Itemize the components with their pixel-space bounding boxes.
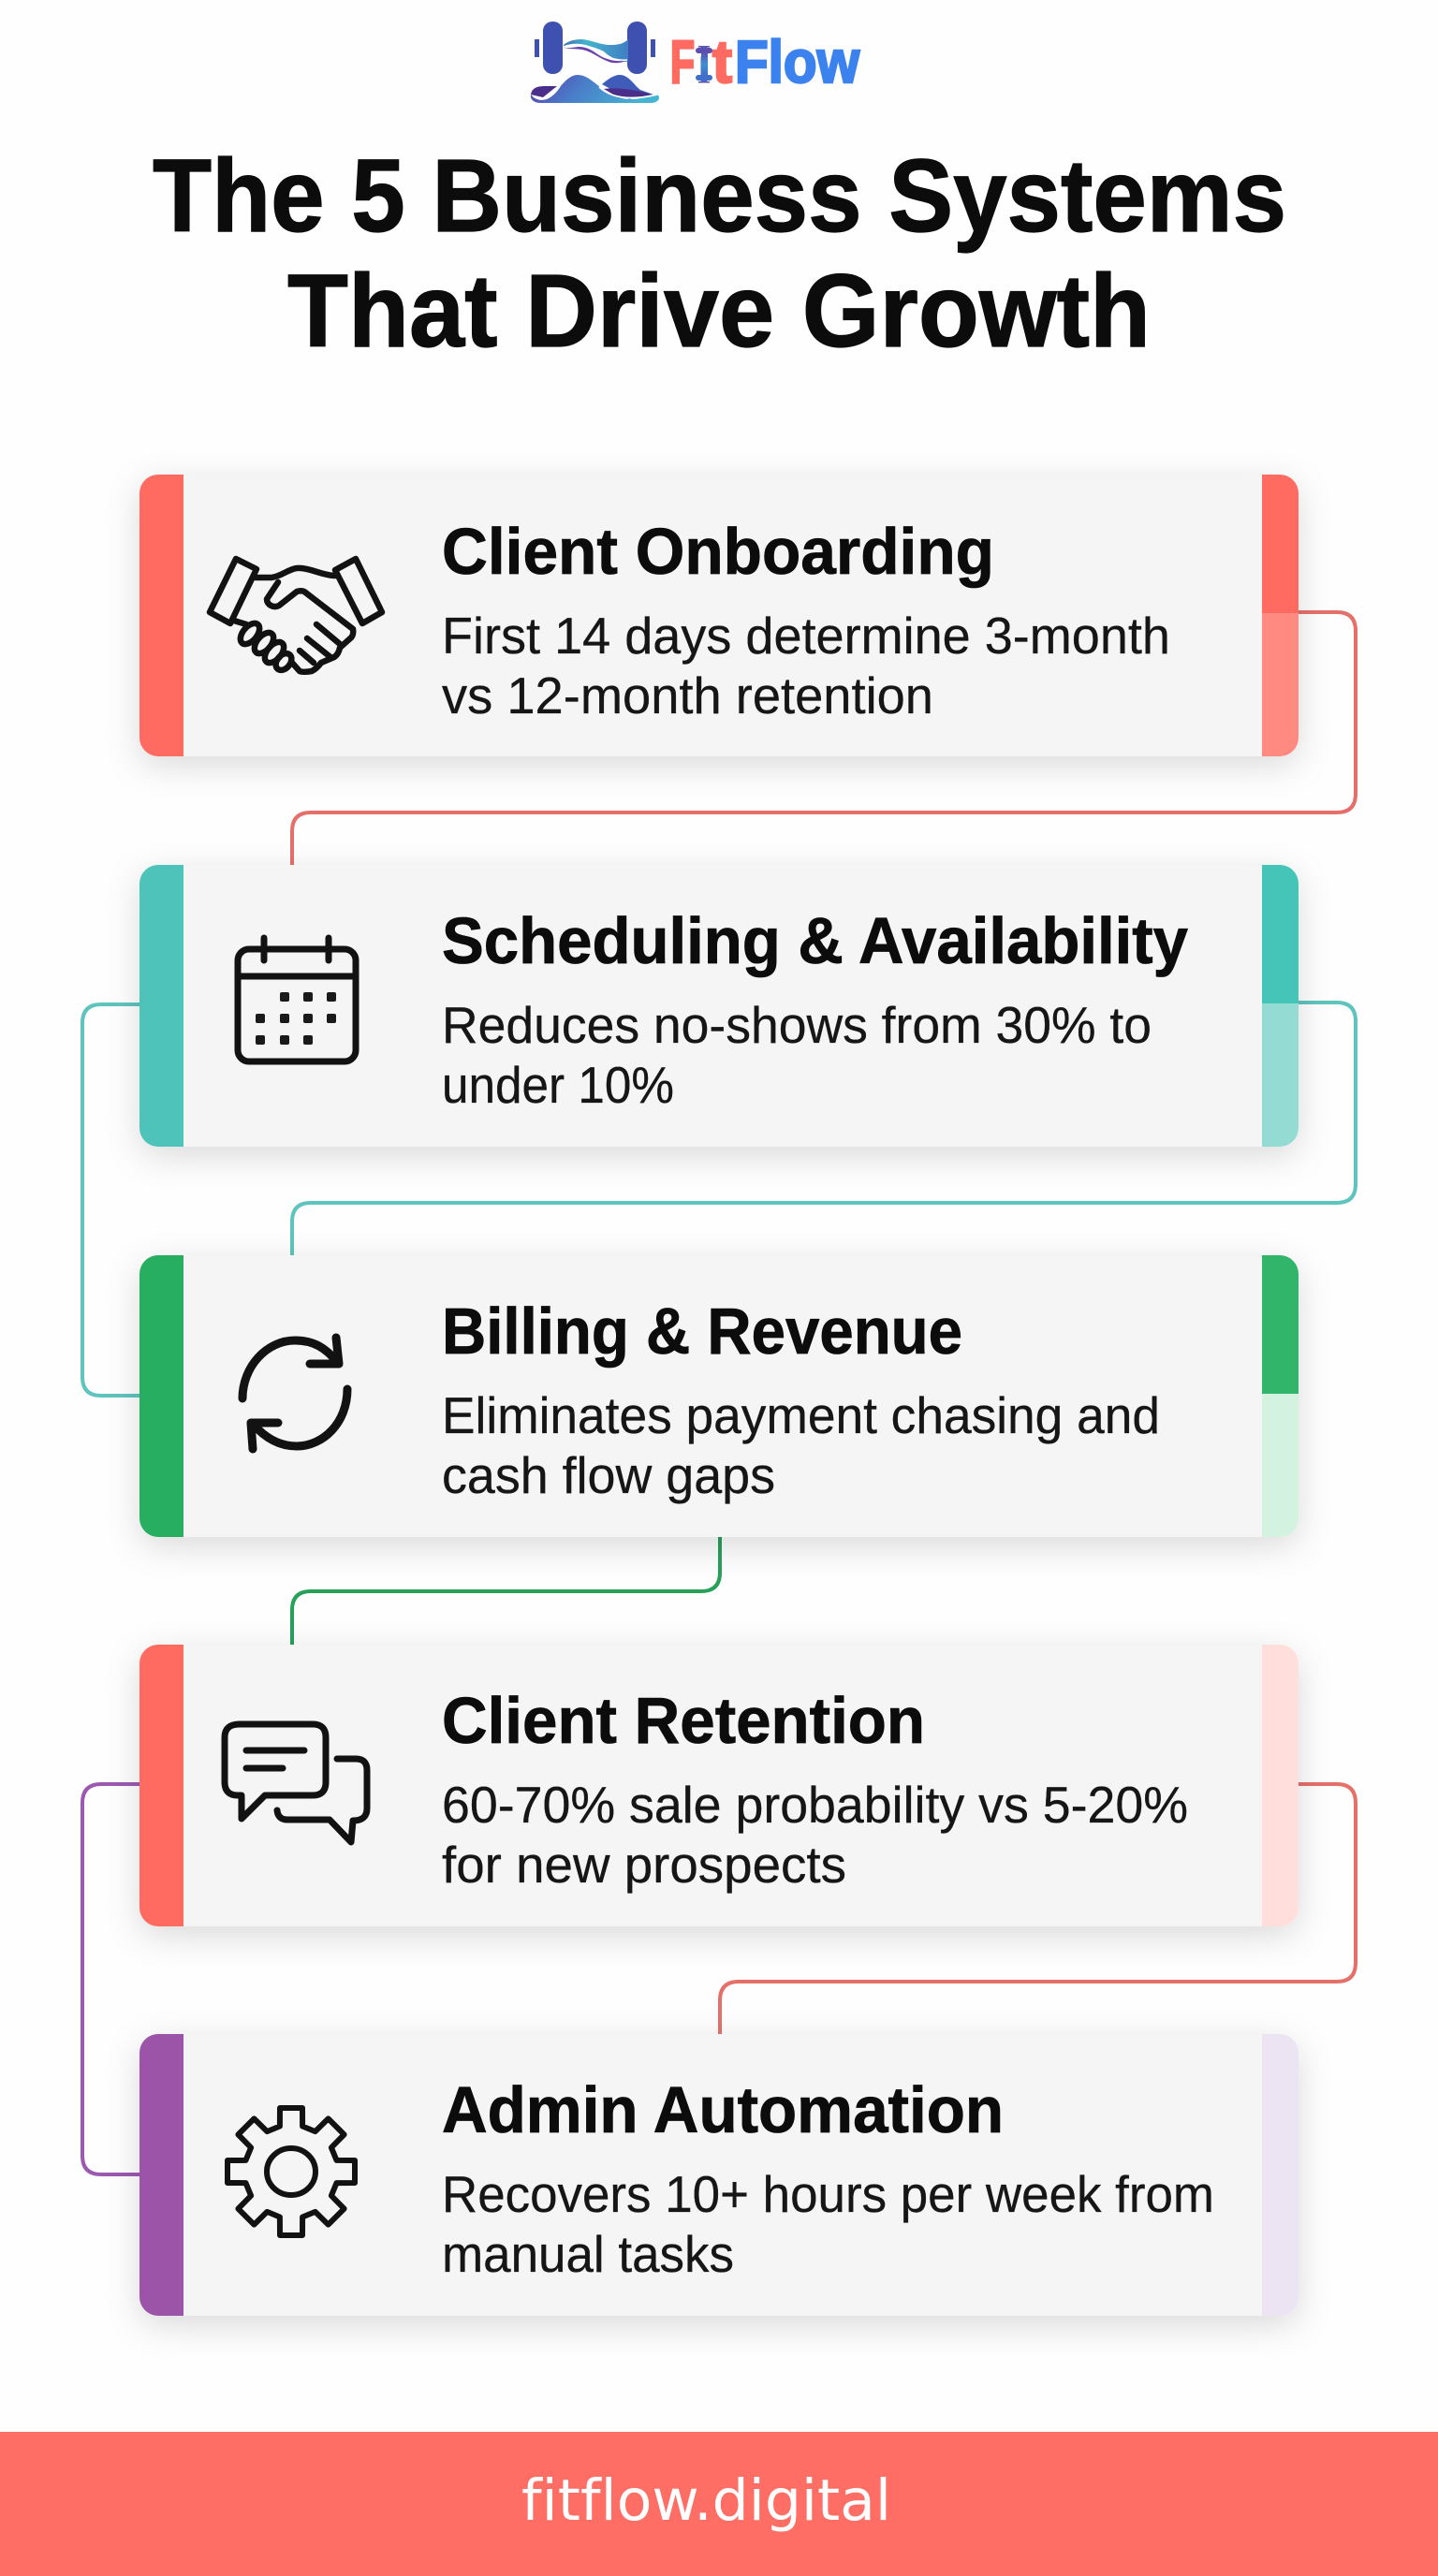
icon: chat bubbles — [225, 1724, 367, 1842]
connector: billing to retention — [292, 1536, 720, 1645]
card description: vs 12-month retention — [442, 666, 933, 724]
card description: Reduces no-shows from 30% to — [442, 996, 1152, 1054]
connector: onboarding to scheduling — [292, 612, 1356, 866]
connector: scheduling to billing right — [292, 1003, 1356, 1255]
card description — [442, 996, 1152, 1114]
card description: Eliminates payment chasing and — [442, 1386, 1160, 1444]
footer band — [0, 2432, 1438, 2576]
title: The 5 Business Systems — [153, 139, 1286, 254]
icon: gear — [227, 2108, 355, 2235]
card description — [442, 1776, 1188, 1894]
card description: manual tasks — [442, 2225, 734, 2283]
icon: refresh arrows — [242, 1338, 347, 1449]
panel: Admin Automation — [139, 2034, 1299, 2316]
card heading: Client Onboarding — [442, 515, 994, 588]
logo: FitFlow — [531, 22, 859, 103]
card heading: Admin Automation — [442, 2073, 1004, 2146]
card heading: Scheduling & Availability — [442, 904, 1188, 977]
card description: 60-70% sale probability vs 5-20% — [442, 1776, 1188, 1834]
logo wordmark: t — [712, 28, 732, 95]
card description: Recovers 10+ hours per week from — [442, 2165, 1214, 2223]
panel: Billing & Revenue — [139, 1255, 1299, 1537]
card description — [442, 2165, 1214, 2283]
connector: scheduling to billing left — [82, 1004, 139, 1396]
card description — [442, 607, 1170, 724]
card heading: Client Retention — [442, 1684, 925, 1757]
card heading: Billing & Revenue — [442, 1295, 962, 1368]
card description: First 14 days determine 3-month — [442, 607, 1170, 665]
card description — [442, 1386, 1160, 1504]
connector: retention to automation left — [82, 1784, 139, 2174]
panel: Scheduling & Availability — [139, 865, 1299, 1147]
panel: Client Onboarding — [139, 475, 1299, 756]
panel: Client Retention — [139, 1645, 1299, 1926]
logo wordmark: i — [697, 39, 711, 92]
card description: cash flow gaps — [442, 1446, 775, 1504]
logo wordmark — [670, 28, 859, 95]
connector: retention to automation right — [720, 1784, 1356, 2034]
footer url: fitflow.digital — [521, 2467, 891, 2534]
card description: under 10% — [442, 1056, 674, 1114]
icon: dumbbell with wave — [531, 22, 659, 103]
logo wordmark: Flow — [735, 28, 859, 95]
title: That Drive Growth — [287, 254, 1151, 369]
icon: handshake — [210, 559, 382, 673]
logo wordmark: F — [670, 28, 695, 95]
icon: calendar — [238, 938, 356, 1061]
title — [153, 139, 1286, 369]
card description: for new prospects — [442, 1836, 846, 1894]
